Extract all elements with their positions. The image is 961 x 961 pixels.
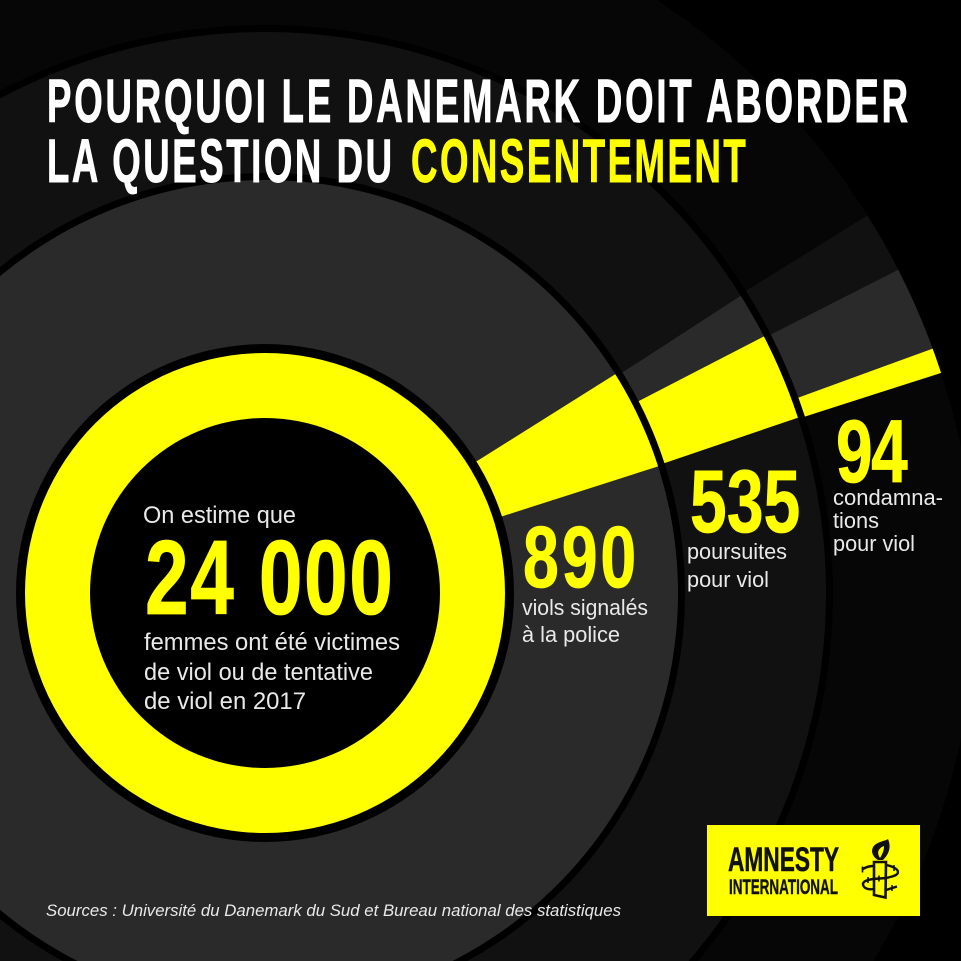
stat: 890 reports: à la police [522, 622, 620, 647]
ring: reports to police (890) [0, 180, 678, 961]
central text block: 24 000 [145, 519, 393, 637]
sources: Sources : Université du Danemark du Sud et Bureau national des statistiques [46, 901, 621, 920]
stat: 94 convictions [833, 401, 943, 556]
stat: 94 convictions: tions [833, 508, 879, 533]
central yellow ring [25, 353, 505, 833]
stat: 890 reports: viols signalés [522, 595, 648, 620]
stat: 535 prosecutions: pour viol [687, 567, 769, 592]
central text block [143, 502, 400, 715]
logo: Amnesty International [707, 825, 920, 916]
stat: 94 convictions: pour viol [833, 531, 915, 556]
title: CONSENTEMENT [411, 126, 746, 195]
stat: 890 reports: 890 [523, 510, 636, 606]
central text block: femmes ont été victimes [144, 629, 400, 656]
logo: Amnesty International: AMNESTY [728, 841, 839, 879]
logo: Amnesty International: INTERNATIONAL [729, 876, 838, 899]
central text block: de viol ou de tentative [144, 659, 373, 686]
title: POURQUOI LE DANEMARK DOIT ABORDER [47, 66, 908, 135]
title: LA QUESTION DU [47, 126, 392, 195]
icon: candle with barbed wire [862, 839, 898, 898]
stat: 535 prosecutions: 535 [690, 451, 800, 551]
stat: 535 prosecutions: poursuites [687, 539, 787, 564]
stat: 94 convictions: condamna- [833, 485, 943, 510]
ring: convictions (94) [746, 216, 941, 417]
title [47, 66, 908, 195]
stat: 890 reports [522, 510, 648, 647]
stat: 535 prosecutions [687, 451, 800, 592]
stat: 94 convictions: 94 [836, 401, 908, 501]
central text block: de viol en 2017 [144, 688, 306, 715]
central text block: On estime que [143, 502, 296, 529]
